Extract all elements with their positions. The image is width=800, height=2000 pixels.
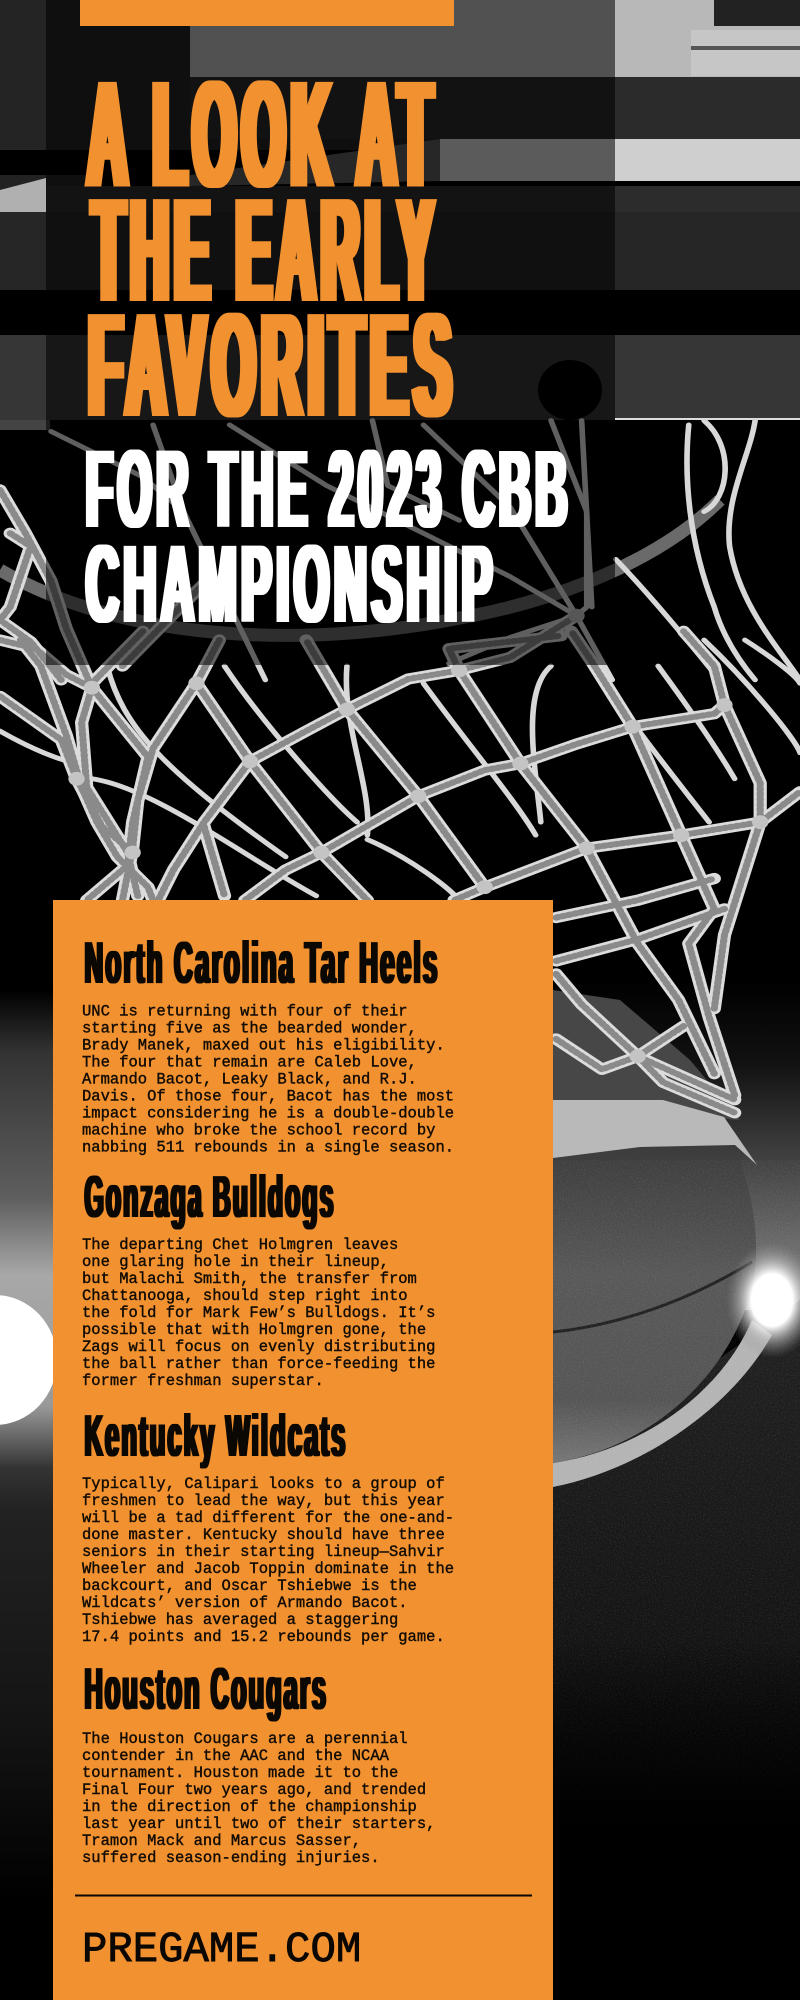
text: Kentucky: Tshiebwe has averaged a staggering: [82, 1611, 398, 1629]
text: Houston: contender in the AAC and the NCAA: [82, 1747, 390, 1765]
text: North Carolina: UNC is returning with four of their: [82, 1002, 408, 1020]
text: Kentucky: freshmen to lead the way, but this year: [82, 1492, 445, 1510]
text: North Carolina: machine who broke the school record by: [82, 1122, 435, 1140]
text: North Carolina: Davis. Of those four, Bacot has the most: [82, 1088, 454, 1106]
text: Kentucky: Wheeler and Jacob Toppin dominate in the: [82, 1560, 454, 1578]
text: North Carolina: Brady Manek, maxed out his eligibility.: [82, 1036, 445, 1054]
text: Houston: suffered season-ending injuries.: [82, 1849, 380, 1867]
text: Kentucky: backcourt, and Oscar Tshiebwe is the: [82, 1577, 417, 1595]
text: Gonzaga: Chattanooga, should step right into: [82, 1287, 408, 1305]
panel: orange team list: Kentucky Wildcats: [84, 1403, 348, 1469]
text: Houston: in the direction of the championship: [82, 1798, 417, 1816]
text: Kentucky: Typically, Calipari looks to a group of: [82, 1475, 445, 1493]
text: Gonzaga: the fold for Mark Few’s Bulldogs. It’s: [82, 1304, 435, 1322]
backboard and bracket hardware: [0, 0, 800, 430]
text: Gonzaga: possible that with Holmgren gone, the: [82, 1321, 426, 1339]
basketball: [553, 990, 772, 1487]
text: Kentucky: done master. Kentucky should have three: [82, 1526, 445, 1544]
title: [86, 50, 572, 646]
panel: orange team list: Gonzaga Bulldogs: [84, 1164, 336, 1230]
text: North Carolina: Armando Bacot, Leaky Black, and R.J.: [82, 1070, 417, 1088]
text: North Carolina: starting five as the bearded wonder,: [82, 1020, 417, 1038]
text: Gonzaga: The departing Chet Holmgren leaves: [82, 1236, 398, 1254]
lens flare on ball: [726, 1242, 800, 1358]
panel: orange team list: [53, 900, 553, 2000]
front of net: [0, 490, 800, 1113]
dark floor: [553, 1310, 800, 2000]
lower photo: gray blur left of panel: [0, 990, 60, 1510]
text: Houston: Tramon Mack and Marcus Sasser,: [82, 1832, 361, 1850]
text: Houston: last year until two of their starters,: [82, 1815, 435, 1833]
text: Kentucky: seniors in their starting lineup—Sahvir: [82, 1543, 445, 1561]
text: Gonzaga: but Malachi Smith, the transfer from: [82, 1270, 417, 1288]
text: Houston: The Houston Cougars are a perennial: [82, 1730, 408, 1748]
gray blur right of panel: [553, 980, 800, 1310]
text: Houston: tournament. Houston made it to the: [82, 1764, 398, 1782]
text: Gonzaga: one glaring hole in their lineup,: [82, 1253, 389, 1271]
text: Houston: Final Four two years ago, and trended: [82, 1781, 426, 1799]
text: North Carolina: impact considering he is a double-double: [82, 1104, 454, 1122]
film grain: [553, 1160, 800, 1800]
panel: orange team list: Houston Cougars: [84, 1656, 328, 1722]
back of net: [0, 421, 800, 900]
text: North Carolina: The four that remain are Caleb Love,: [82, 1054, 417, 1072]
blown-out light left: [0, 1295, 57, 1425]
text: North Carolina: nabbing 511 rebounds in a single season.: [82, 1138, 454, 1156]
footer logo text: PREGAME.COM: [82, 1926, 361, 1974]
text: Gonzaga: former freshman superstar.: [82, 1372, 324, 1390]
text: Gonzaga: Zags will focus on evenly distributing: [82, 1338, 435, 1356]
top orange bar: [80, 0, 454, 26]
text: Kentucky: will be a tad different for the one-and-: [82, 1509, 454, 1527]
text: Gonzaga: the ball rather than force-feeding the: [82, 1355, 435, 1373]
text: Kentucky: Wildcats’ version of Armando Bacot.: [82, 1594, 408, 1612]
dark translucent overlay behind title: [46, 0, 615, 665]
text: Kentucky: 17.4 points and 15.2 rebounds per game.: [82, 1628, 445, 1646]
rim: [0, 500, 720, 635]
